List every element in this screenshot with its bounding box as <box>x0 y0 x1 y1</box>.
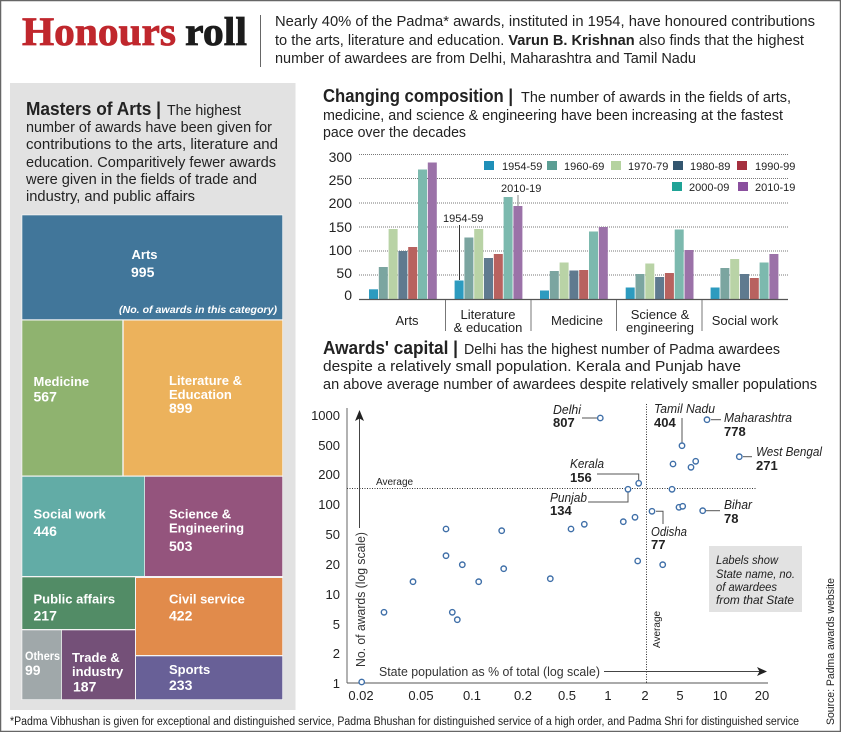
state labels: Punjab <box>550 490 587 505</box>
Trade and industry: 187 <box>73 678 97 694</box>
note box <box>709 546 802 612</box>
Social work: Social work <box>34 506 107 522</box>
legend: 1970-79 <box>628 161 668 173</box>
y axis labels: 250 <box>329 172 352 188</box>
Medicine: 567 <box>34 388 57 404</box>
Sports <box>136 656 282 699</box>
masters of arts text: contributions to the arts, literature and <box>26 137 278 153</box>
state labels: West Bengal <box>756 444 823 459</box>
x axis labels: 10 <box>713 688 727 703</box>
title: Honours <box>22 9 176 54</box>
x axis labels: 0.2 <box>514 688 532 703</box>
x axis labels: 2 <box>641 688 649 703</box>
average labels: Average <box>652 610 663 648</box>
average labels <box>376 477 663 648</box>
Medicine: Medicine <box>34 374 89 389</box>
Arts: 995 <box>131 264 155 280</box>
state labels: Bihar <box>724 497 753 512</box>
y axis labels: 1000 <box>311 408 340 423</box>
legend <box>484 161 795 194</box>
masters of arts text: Masters of Arts | <box>26 99 161 119</box>
Trade and industry <box>62 630 135 699</box>
x axis labels: 1 <box>604 688 612 703</box>
y axis labels: 0 <box>344 287 352 303</box>
masters of arts text: education. Comparitively fewer awards <box>26 155 276 171</box>
x axis labels: 20 <box>755 688 769 703</box>
y axis title and arrow <box>354 410 368 667</box>
Civil service: 422 <box>169 608 193 624</box>
Literature and education <box>124 320 282 476</box>
y axis labels <box>311 408 340 691</box>
Public affairs: Public affairs <box>34 592 115 606</box>
heading: changing composition <box>323 86 791 141</box>
category labels: Arts <box>395 313 419 328</box>
heading: awards' capital: Awards' capital | <box>323 338 458 358</box>
y axis title and arrow: No. of awards (log scale) <box>354 532 368 667</box>
Social work: 446 <box>34 523 57 539</box>
heading: awards' capital <box>323 338 817 393</box>
note box: from that State <box>716 593 794 607</box>
group: Science and engineering <box>626 230 694 300</box>
state labels: 807 <box>553 415 575 430</box>
group: Literature and education <box>455 197 522 300</box>
group: Social work <box>711 254 778 300</box>
masters of arts text: The highest <box>167 103 241 119</box>
heading: changing composition: Changing composition | <box>323 86 513 106</box>
Medicine <box>22 320 122 476</box>
category labels: Social work <box>712 313 779 328</box>
Sports: 233 <box>169 677 193 693</box>
x axis labels: 5 <box>676 688 684 703</box>
bar annotations: 2010-19 <box>501 183 541 195</box>
y axis labels: 200 <box>329 195 352 211</box>
Civil service: Civil service <box>169 592 245 606</box>
legend: 1980-89 <box>690 161 730 173</box>
treemap <box>22 214 283 700</box>
average labels: Average <box>376 477 414 488</box>
y axis labels: 100 <box>318 497 340 512</box>
Trade and industry: Trade & <box>72 650 120 665</box>
heading: changing composition: medicine, and science & engineering have been increasing at the fastest <box>323 108 783 124</box>
category labels: Literature <box>461 307 515 322</box>
heading: changing composition: pace over the decades <box>323 125 466 141</box>
y axis labels: 100 <box>329 242 352 258</box>
source: Source: Padma awards website <box>825 578 837 725</box>
y axis labels: 10 <box>326 587 340 602</box>
legend: 2010-19 <box>755 182 795 194</box>
y axis labels: 5 <box>333 617 340 632</box>
state labels: 778 <box>724 424 746 439</box>
x axis labels: 0.1 <box>463 688 481 703</box>
Public affairs <box>22 577 135 629</box>
y axis labels: 1 <box>333 676 340 691</box>
state labels: Maharashtra <box>724 410 792 425</box>
y axis labels: 150 <box>329 219 352 235</box>
state labels <box>550 401 823 552</box>
intro text: Nearly 40% of the Padma* awards, instituted in 1954, have honoured contributions <box>275 13 815 30</box>
legend: 1990-99 <box>755 161 795 173</box>
Public affairs: 217 <box>34 608 57 624</box>
bar annotations <box>443 183 541 280</box>
x axis title and arrow: State population as % of total (log scale) <box>379 665 600 679</box>
state labels: Kerala <box>570 456 604 471</box>
Trade and industry: industry <box>72 664 124 679</box>
masters of arts text: industry, and public affairs <box>26 189 195 205</box>
bar annotations: 1954-59 <box>443 213 483 225</box>
x axis title and arrow <box>379 665 767 679</box>
Arts: (No. of awards in this category) <box>119 304 278 316</box>
heading: awards' capital: Delhi has the highest number of Padma awardees <box>464 342 780 358</box>
category labels <box>395 307 779 335</box>
state labels: Tamil Nadu <box>654 401 715 416</box>
state labels: 156 <box>570 470 592 485</box>
note box: of awardees <box>716 580 777 594</box>
state labels: 77 <box>651 537 665 552</box>
masters of arts text: number of awards have been given for <box>26 120 272 136</box>
leader lines <box>582 418 752 524</box>
x axis labels <box>348 688 769 703</box>
y axis labels: 20 <box>326 557 340 572</box>
state labels: 271 <box>756 458 778 473</box>
category labels: Science & <box>631 307 690 322</box>
heading: changing composition: The number of awards in the fields of arts, <box>521 90 791 106</box>
category labels: engineering <box>626 320 694 335</box>
state labels: Delhi <box>553 402 582 417</box>
Arts <box>22 215 282 319</box>
Arts: Arts <box>132 247 158 262</box>
group: Medicine <box>540 227 608 300</box>
Literature and education: 899 <box>169 400 193 416</box>
intro text <box>275 13 815 67</box>
y axis labels: 300 <box>329 149 352 165</box>
Science and engineering: 503 <box>169 538 193 554</box>
x axis labels: 0.5 <box>558 688 576 703</box>
legend: 1954-59 <box>502 161 542 173</box>
Science and engineering: Engineering <box>169 520 244 536</box>
y axis labels: 50 <box>326 527 340 542</box>
category labels: & education <box>454 320 522 335</box>
scatter chart <box>311 401 823 703</box>
data points <box>359 415 742 685</box>
legend: 2000-09 <box>689 182 729 194</box>
heading: awards' capital: an above average number of awardees despite relatively smaller populations <box>323 377 817 393</box>
state labels: 134 <box>550 503 572 518</box>
note box: Labels show <box>716 553 779 567</box>
x axis labels: 0.05 <box>408 688 434 703</box>
Literature and education: Education <box>169 387 232 402</box>
heading: awards' capital: despite a relatively small population. Kerala and Punjab have <box>323 359 741 375</box>
Others: Others <box>25 651 60 663</box>
title <box>22 9 247 54</box>
y axis labels: 200 <box>318 467 340 482</box>
Science and engineering <box>145 477 282 576</box>
state labels: Odisha <box>651 524 687 539</box>
bar chart <box>329 149 795 335</box>
intro text: number of awardees are from Delhi, Maharashtra and Tamil Nadu <box>275 50 696 67</box>
y axis labels <box>329 149 352 303</box>
state labels: 78 <box>724 511 738 526</box>
masters of arts text <box>25 99 278 205</box>
Literature and education: Literature & <box>169 373 242 388</box>
Others: 99 <box>25 662 41 678</box>
Science and engineering: Science & <box>169 506 231 522</box>
y axis labels: 500 <box>318 438 340 453</box>
Sports: Sports <box>169 662 210 677</box>
legend: 1960-69 <box>564 161 604 173</box>
masters of arts text: were given in the fields of trade and <box>25 172 257 188</box>
group: Arts <box>369 162 437 300</box>
panel: masters of arts <box>10 83 296 710</box>
title: roll <box>185 9 247 54</box>
x axis labels: 0.02 <box>348 688 374 703</box>
y axis labels: 50 <box>336 265 352 281</box>
Social work <box>22 477 144 576</box>
state labels: 404 <box>654 415 676 430</box>
intro text: to the arts, literature and education. Varun B. Krishnan also finds that the highest <box>275 32 805 49</box>
Others <box>22 630 61 699</box>
note box: State name, no. <box>716 567 795 581</box>
Civil service <box>136 578 282 655</box>
category labels: Medicine <box>551 313 603 328</box>
y axis labels: 2 <box>333 646 340 661</box>
